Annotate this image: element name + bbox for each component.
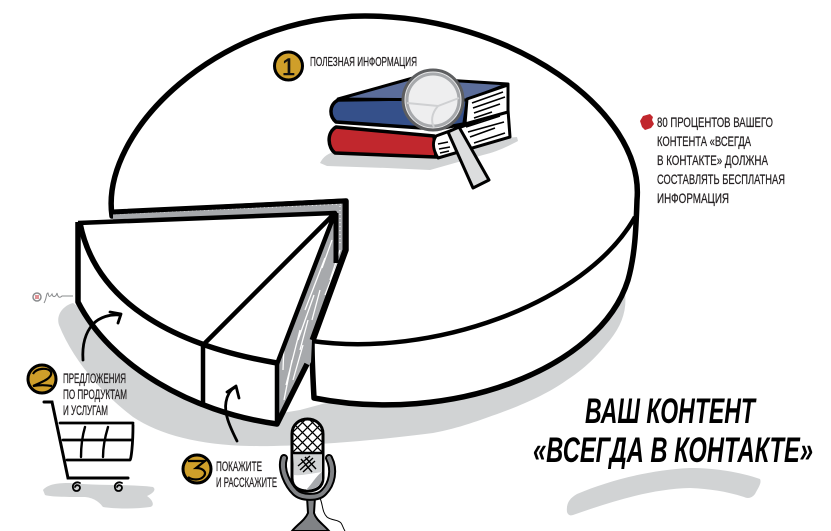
badge 1 bbox=[274, 52, 302, 81]
text: 80 percent note bbox=[657, 114, 785, 206]
text: 80 percent note: 80 ПРОЦЕНТОВ ВАШЕГО bbox=[657, 114, 773, 130]
mic holder bbox=[292, 497, 329, 531]
back wall specks bbox=[116, 204, 343, 246]
arrow to offers bbox=[83, 312, 121, 360]
mic cord bbox=[320, 498, 345, 531]
blue book spine bbox=[331, 98, 468, 129]
blue book cover bbox=[338, 78, 508, 100]
badge 2 bbox=[28, 365, 56, 393]
icon: red bullet bbox=[640, 114, 654, 130]
red book pages bbox=[434, 110, 510, 158]
mic band bbox=[293, 453, 322, 475]
text: show and tell: И РАССКАЖИТЕ bbox=[216, 475, 277, 490]
text: show and tell: ПОКАЖИТЕ bbox=[216, 459, 262, 474]
text: offers: ПРЕДЛОЖЕНИЯ bbox=[63, 371, 126, 386]
badge 1: 1 bbox=[282, 54, 295, 81]
hatched side wall bbox=[278, 214, 345, 420]
label: useful information: ПОЛЕЗНАЯ ИНФОРМАЦИЯ bbox=[310, 55, 417, 69]
cut wall lines bbox=[112, 201, 345, 340]
text: show and tell bbox=[216, 459, 277, 490]
large pie body bbox=[111, 16, 637, 405]
red book bbox=[329, 127, 436, 157]
title swoosh bbox=[567, 468, 761, 515]
text: 80 percent note: КОНТЕНТА «ВСЕГДА bbox=[657, 133, 751, 149]
blue book pages bbox=[465, 85, 508, 124]
slice outer bottom bbox=[78, 222, 307, 424]
mic grille bbox=[294, 420, 322, 452]
text: offers: И УСЛУГАМ bbox=[63, 403, 108, 418]
text: offers: ПО ПРОДУКТАМ bbox=[63, 387, 127, 402]
pie top surface edge bbox=[312, 217, 635, 344]
slice body bbox=[78, 213, 335, 423]
slice top edges bbox=[78, 213, 335, 364]
pie ground shadow bbox=[58, 293, 625, 446]
mic body bbox=[292, 419, 323, 491]
magnifier handle bbox=[448, 127, 489, 188]
back wall strip bbox=[113, 202, 345, 248]
slice: offers and show-and-tell bbox=[78, 213, 335, 424]
cut wall shading bbox=[112, 201, 345, 420]
icon: books and magnifier bbox=[320, 70, 518, 188]
pie outer outline bbox=[111, 16, 637, 405]
text: 80 percent note: ИНФОРМАЦИЯ bbox=[657, 190, 729, 206]
books shadow bbox=[320, 137, 518, 170]
chalk scratches bbox=[283, 240, 340, 400]
cart shadow bbox=[43, 483, 154, 508]
mic sound mark bbox=[298, 456, 316, 472]
icon: microphone bbox=[283, 400, 345, 531]
text: 80 percent note: В КОНТАКТЕ» ДОЛЖНА bbox=[657, 152, 768, 168]
slice dividers bbox=[203, 345, 277, 423]
icon: shopping cart bbox=[44, 402, 133, 491]
text: offers bbox=[63, 371, 127, 418]
signature bbox=[33, 293, 73, 303]
title bbox=[533, 392, 813, 470]
slice arc bbox=[80, 223, 277, 363]
magnifier lens bbox=[403, 70, 463, 130]
badge 3 bbox=[183, 455, 211, 483]
arrow to show and tell bbox=[226, 386, 239, 441]
